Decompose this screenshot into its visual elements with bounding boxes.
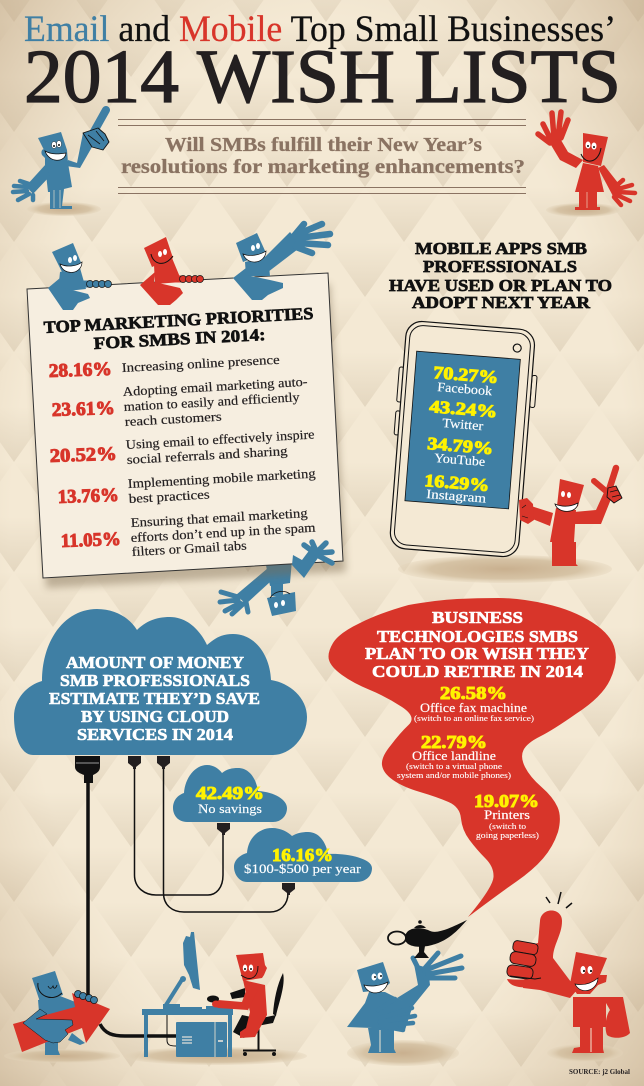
heading: mobile apps: MOBILE APPS SMB <box>415 239 587 258</box>
panel: priorities note <box>27 273 346 588</box>
heading: priorities: TOP MARKETING PRIORITIES <box>43 304 314 337</box>
list: priorities: filters or Gmail tabs <box>131 538 247 559</box>
list: priorities <box>48 352 316 559</box>
list: priorities: Using email to effectively inspire <box>125 426 315 452</box>
smoke heading <box>365 608 589 681</box>
icon: red figure with phone <box>519 468 622 566</box>
heading: mobile apps: ADOPT NEXT YEAR <box>412 293 591 312</box>
cloud: 100-500 per year: 16.16% <box>272 845 333 865</box>
icon: blue figure pointing up <box>13 110 109 216</box>
stat: landline <box>397 732 511 780</box>
heading: priorities: FOR SMBS IN 2014: <box>93 325 266 353</box>
stat: fax: (switch to an online fax service) <box>414 713 534 723</box>
cloud text: BY USING CLOUD <box>81 707 229 726</box>
icon: phone with app stats <box>385 320 541 558</box>
subtitle with rules: resolutions for marketing enhancements? <box>121 156 525 178</box>
list: priorities: 11.05% <box>60 529 121 552</box>
smoke heading: BUSINESS <box>432 608 523 627</box>
list: priorities: Implementing mobile marketing <box>127 465 316 491</box>
list: priorities: mation to easily and efficiently <box>123 389 300 414</box>
cloud: 100-500 per year <box>234 828 372 882</box>
heading: priorities <box>43 304 314 353</box>
icon: desk, computer and red worker <box>123 932 307 1065</box>
icon: upside-down figure hand <box>292 542 332 578</box>
stat: landline: 22.79% <box>421 732 487 752</box>
list: priorities: 28.16% <box>48 359 112 382</box>
icon: genie lamp <box>388 920 467 958</box>
icon: upside-down blue figure behind note <box>220 560 296 616</box>
app stats: Instagram <box>426 486 487 506</box>
icon: blue figure holding lamp <box>347 953 462 1066</box>
heading: mobile apps: HAVE USED OR PLAN TO <box>389 276 612 295</box>
cloud text <box>49 653 260 744</box>
icon: blue figure with red arrow <box>4 971 178 1063</box>
title: 2014 WISH LISTS <box>24 35 621 119</box>
list: priorities: social referrals and sharing <box>126 443 288 467</box>
cloud: no savings: 42.49% <box>196 783 264 803</box>
stat: landline: (switch to a virtual phone <box>406 761 502 771</box>
app stats: Twitter <box>442 415 485 433</box>
stat: fax: 26.58% <box>440 683 507 703</box>
list: priorities: 13.76% <box>57 485 119 508</box>
app stats: YouTube <box>434 450 486 469</box>
app stats: 16.29% <box>424 470 490 495</box>
smoke heading: COULD RETIRE IN 2014 <box>372 662 583 681</box>
heading: mobile apps <box>389 239 612 312</box>
stat: printers: (switch to <box>489 821 526 831</box>
source: SOURCE: j2 Global <box>569 1067 630 1076</box>
subtitle with rules <box>118 120 526 194</box>
list: priorities: best practices <box>128 486 210 506</box>
smoke heading: TECHNOLOGIES SMBS <box>377 627 578 646</box>
stat: printers <box>474 791 539 840</box>
panel: smoke from lamp <box>328 598 616 917</box>
subtitle with rules: Will SMBs fulfill their New Year’s <box>165 134 482 156</box>
heading: mobile apps: PROFESSIONALS <box>423 257 577 276</box>
cloud: no savings <box>173 765 287 822</box>
app stats: 34.79% <box>427 433 494 458</box>
stat: landline: Office landline <box>412 748 496 763</box>
stat: landline: system and/or mobile phones) <box>397 770 511 780</box>
list: priorities: efforts don’t end up in the spam <box>130 520 316 545</box>
app stats: 70.27% <box>433 362 499 387</box>
cloud text: SMB PROFESSIONALS <box>60 671 250 690</box>
stat: printers: Printers <box>484 807 530 822</box>
icon: red figure on note centre <box>140 237 204 305</box>
list: priorities: 23.61% <box>51 398 115 421</box>
stat: fax <box>414 683 534 723</box>
app stats: 43.24% <box>429 396 498 421</box>
list: priorities: reach customers <box>124 409 222 429</box>
cloud text: ESTIMATE THEY’D SAVE <box>49 689 260 708</box>
list: priorities: Adopting email marketing auto- <box>122 374 308 399</box>
smoke heading: PLAN TO OR WISH THEY <box>365 644 589 663</box>
icon: red figure thumbs up <box>506 892 630 1062</box>
cloud text: SERVICES IN 2014 <box>77 725 233 744</box>
icon: red figure waving <box>538 112 635 217</box>
app stats: Facebook <box>437 379 493 398</box>
stat: printers: 19.07% <box>474 791 539 811</box>
cloud: 100-500 per year: $100-$500 per year <box>244 861 362 876</box>
icon: blue figure on note left <box>48 243 112 310</box>
cables and plugs <box>75 756 295 1000</box>
list: priorities: 20.52% <box>49 444 117 467</box>
icon: shadow under phone <box>398 555 612 583</box>
app stats <box>424 362 499 506</box>
stat: printers: going paperless) <box>476 830 539 840</box>
stat: fax: Office fax machine <box>420 700 527 715</box>
panel: cloud heading <box>14 609 307 755</box>
list: priorities: Increasing online presence <box>121 352 280 375</box>
icon: blue figure on note right waving <box>233 224 330 300</box>
list: priorities: Ensuring that email marketing <box>130 505 308 530</box>
cloud text: AMOUNT OF MONEY <box>66 653 244 672</box>
cloud: no savings: No savings <box>198 801 262 816</box>
title: Email and Mobile Top Small Businesses’ <box>24 9 616 50</box>
